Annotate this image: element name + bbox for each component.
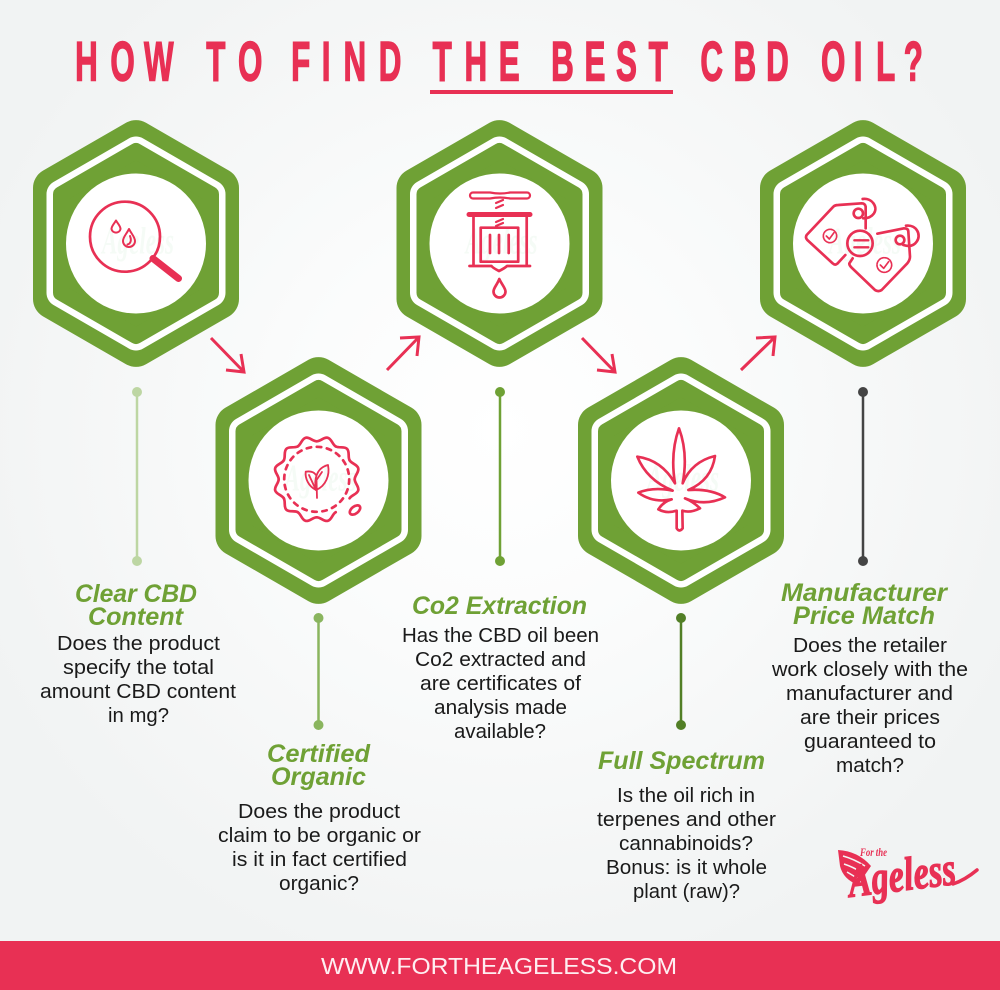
logo: For the Ageless: Ageless <box>843 843 959 908</box>
text block: certified organic: Certified <box>267 740 371 768</box>
text block: certified organic: claim to be organic or <box>218 825 421 847</box>
title: THE <box>433 30 520 93</box>
text block: full spectrum: terpenes and other <box>597 809 776 831</box>
title: BEST <box>551 30 668 93</box>
text block: full spectrum: Is the oil rich in <box>617 785 755 807</box>
text block: CO2 extraction: analysis made <box>434 697 567 719</box>
text block: full spectrum: cannabinoids? <box>619 833 753 855</box>
connector 4 <box>676 614 686 730</box>
text block: certified organic: Does the product <box>238 801 400 823</box>
text block: manufacturer price match: Price Match <box>793 602 935 630</box>
text block: CO2 extraction: Co2 extracted and <box>415 649 586 671</box>
text block: certified organic <box>218 740 421 895</box>
icon: magnifier with drops <box>90 202 178 278</box>
step 3 hexagon: CO2 extraction <box>416 140 582 347</box>
text block: clear CBD content: specify the total <box>63 657 214 679</box>
title: TO <box>206 30 262 93</box>
connector 1 <box>132 388 142 566</box>
icon: organic seal with leaf <box>273 435 362 523</box>
title: FIND <box>291 30 401 93</box>
step 5 hexagon: manufacturer price match <box>780 140 946 347</box>
connector 5 <box>858 388 868 566</box>
title: OIL? <box>821 30 923 93</box>
icon: cannabis leaf <box>637 428 725 530</box>
text block: manufacturer price match <box>771 579 968 777</box>
text block: CO2 extraction: Has the CBD oil been <box>402 625 599 647</box>
title: CBD <box>700 30 789 93</box>
text block: certified organic: Organic <box>271 763 366 791</box>
text block: manufacturer price match: Does the retailer <box>793 635 947 657</box>
text block: clear CBD content: Clear CBD <box>75 580 197 608</box>
text block: manufacturer price match: are their prices <box>800 707 940 729</box>
step 1 hexagon: clear CBD content <box>53 140 219 347</box>
arrow 4 <box>741 337 775 370</box>
text block: certified organic: is it in fact certified <box>232 849 407 871</box>
text block: full spectrum: plant (raw)? <box>633 881 740 903</box>
title: HOW <box>75 30 174 93</box>
text block: clear CBD content: amount CBD content <box>40 681 236 703</box>
text block: CO2 extraction: available? <box>454 721 546 743</box>
text block: manufacturer price match: match? <box>836 755 904 777</box>
text block: manufacturer price match: manufacturer and <box>786 683 953 705</box>
connector 3 <box>496 388 504 566</box>
text block: clear CBD content: Content <box>88 603 185 631</box>
text block: full spectrum: Bonus: is it whole <box>606 857 767 879</box>
step 4 hexagon: full spectrum <box>598 377 764 584</box>
arrow 3 <box>582 338 615 372</box>
text block: CO2 extraction <box>402 592 599 743</box>
text block: manufacturer price match: guaranteed to <box>804 731 936 753</box>
text block: CO2 extraction: Co2 Extraction <box>412 592 587 620</box>
text block: full spectrum: Full Spectrum <box>598 747 765 775</box>
icon: two price tags with equals sign <box>806 199 919 291</box>
text block: CO2 extraction: are certificates of <box>420 673 581 695</box>
text block: clear CBD content: Does the product <box>57 633 220 655</box>
connector 2 <box>314 614 323 730</box>
text block: clear CBD content: in mg? <box>108 705 169 727</box>
arrow 1 <box>211 338 244 372</box>
arrow 2 <box>387 337 419 370</box>
icon: press with oil drop <box>469 192 530 298</box>
text block: manufacturer price match: Manufacturer <box>781 579 948 607</box>
step 2 hexagon: certified organic <box>236 377 402 584</box>
title <box>75 30 923 94</box>
text block: certified organic: organic? <box>279 873 359 895</box>
text block: full spectrum <box>597 747 776 903</box>
footer banner: WWW.FORTHEAGELESS.COM <box>321 953 677 979</box>
footer banner <box>0 941 1000 990</box>
text block: manufacturer price match: work closely with the <box>771 659 968 681</box>
text block: clear CBD content <box>40 580 236 727</box>
logo: For the Ageless: For the <box>859 847 887 859</box>
